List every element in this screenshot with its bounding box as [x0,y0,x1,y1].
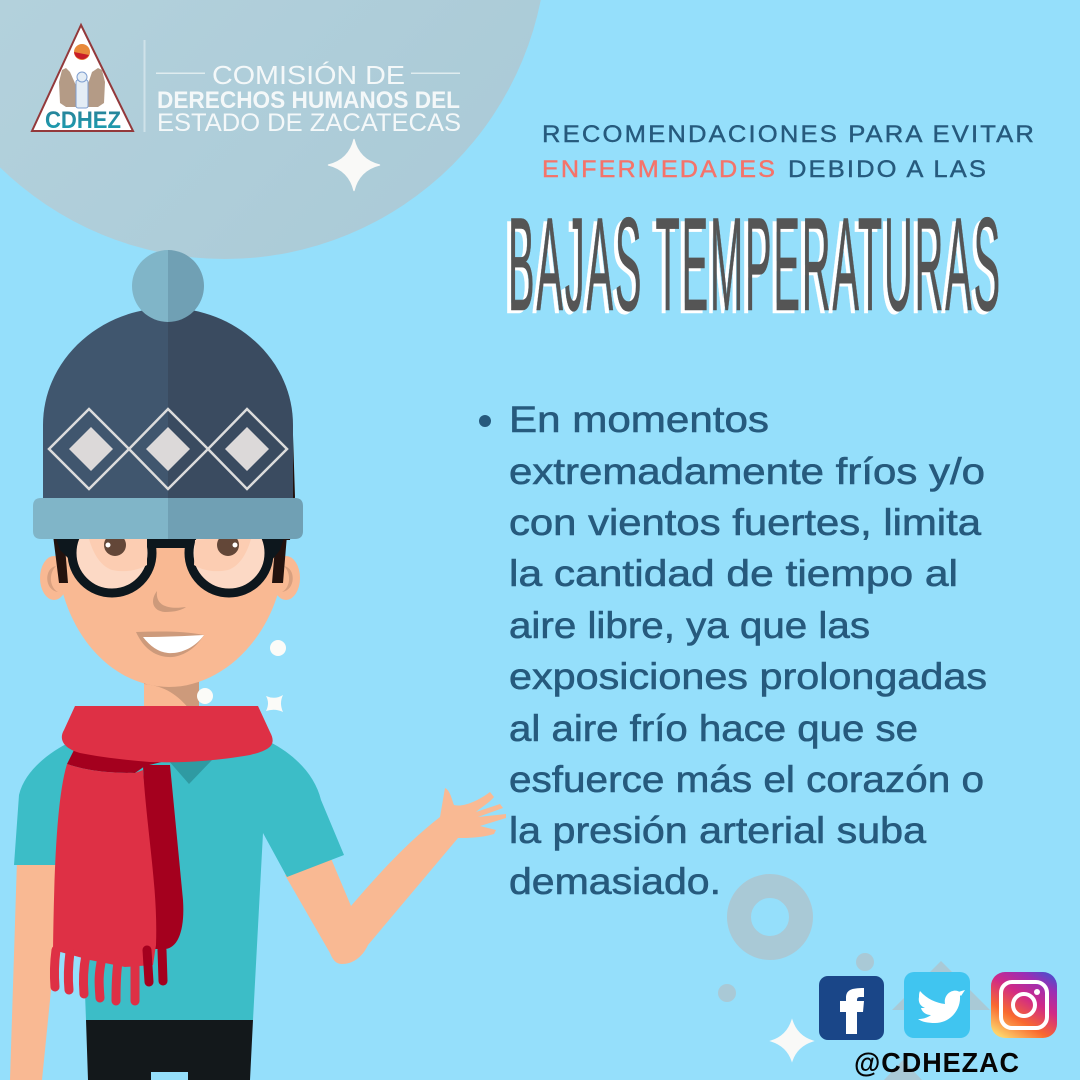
intro heading: DEBIDO A LAS [788,156,988,183]
sparkle top [328,139,380,191]
organisation name: COMISIÓN DE [212,60,405,90]
body text: con vientos fuertes, limita [509,502,981,543]
logo divider [144,40,146,132]
body text: exposiciones prolongadas [509,656,987,697]
bullet [479,415,491,427]
scarf back panel [143,765,183,949]
organisation name [156,60,461,137]
scarf collar [62,706,273,762]
glasses [55,513,285,593]
body text: demasiado. [509,861,721,902]
scarf front panel [53,764,156,967]
pants [86,1020,253,1080]
social handle: @CDHEZAC [854,1047,1020,1078]
neck [144,680,199,712]
face [62,535,279,687]
body text: la cantidad de tiempo al [509,553,958,594]
intro heading: RECOMENDACIONES PARA EVITAR [542,121,1036,148]
organisation name: DERECHOS HUMANOS DEL [157,87,460,114]
nose [153,591,186,612]
body text: aire libre, ya que las [509,605,870,646]
scarf fringe [54,950,135,1001]
hair [280,435,295,540]
body text: la presión arterial suba [509,810,926,851]
icon: facebook [819,976,884,1040]
collar [168,760,212,784]
hat [33,250,303,539]
scarf dark band [67,748,170,773]
mouth [136,631,204,657]
body text [509,399,987,902]
body text: extremadamente fríos y/o [509,451,985,492]
logo CDHEZ: CDHEZ [45,107,121,134]
background circle [0,0,547,259]
logo CDHEZ [32,25,133,134]
sparkle bottom [771,1020,813,1061]
body text: esfuerce más el corazón o [509,759,984,800]
sideburns [53,535,287,583]
decorative shapes bottom right [718,886,990,1080]
right arm [285,788,506,964]
ears [40,556,300,600]
scarf dark fringe [147,950,163,982]
icon: twitter [904,972,970,1038]
left arm [10,860,55,1080]
icon: instagram [991,972,1057,1038]
character [10,250,506,1080]
shirt [14,742,344,1020]
body text: al aire frío hace que se [509,708,918,749]
snow dots [197,640,286,712]
intro heading [542,121,1036,183]
body text: En momentos [509,399,769,440]
intro heading: ENFERMEDADES [542,156,777,183]
organisation name: ESTADO DE ZACATECAS [157,109,461,137]
